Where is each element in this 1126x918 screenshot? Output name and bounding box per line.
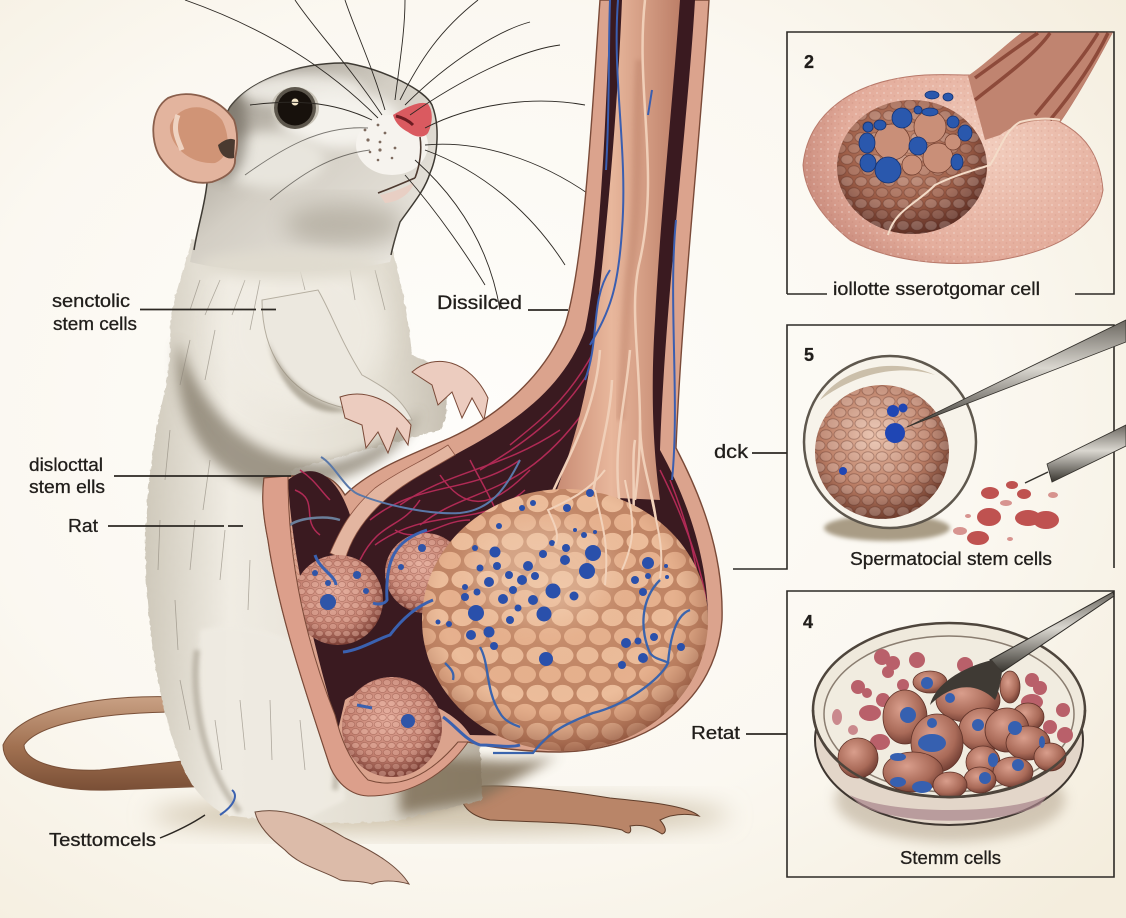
long blue nerve xyxy=(321,457,520,513)
blue loop xyxy=(288,518,340,527)
rat under-sac fur xyxy=(400,755,560,815)
panel 5 number: 5 xyxy=(804,345,814,365)
panel 5 cell ball xyxy=(815,385,949,519)
large testis blue spots xyxy=(436,489,685,669)
lower lip xyxy=(380,182,414,203)
panel 4 caption: Stemm cells xyxy=(900,848,1001,868)
left wall strip xyxy=(263,476,468,796)
label: dck xyxy=(714,442,787,463)
panel: step 5 xyxy=(733,320,1126,569)
head outline xyxy=(194,63,437,255)
whiskers xyxy=(185,0,590,310)
panel 2 number: 2 xyxy=(804,52,814,72)
fur strokes xyxy=(158,270,385,770)
small testis middle xyxy=(385,533,465,613)
ear xyxy=(153,94,237,183)
rat lower body shade xyxy=(199,627,345,822)
nose xyxy=(393,103,432,137)
label: dislocttal stem ells xyxy=(29,455,291,497)
panel 4 number: 4 xyxy=(803,612,813,632)
mouth xyxy=(378,137,421,193)
panel 5 dish xyxy=(804,356,976,528)
panel 5 shadow xyxy=(824,515,950,541)
panel 2 skin body xyxy=(803,33,1112,263)
label: dislocttal stem ells: dislocttal xyxy=(29,455,103,475)
paw right xyxy=(412,361,488,420)
cavity vessels xyxy=(295,340,706,600)
panel: step 2 xyxy=(787,32,1114,299)
label: Retat xyxy=(691,723,787,743)
petri dish xyxy=(813,623,1085,842)
panel 2 duct xyxy=(968,33,1112,140)
spatula xyxy=(930,592,1114,705)
nostril xyxy=(396,116,413,125)
panel 5 caption: Spermatocial stem cells xyxy=(850,549,1052,569)
sac wall texture xyxy=(268,482,340,770)
dish front rim xyxy=(813,710,1085,797)
label: Testtomcels xyxy=(49,815,205,850)
panel 5 dish inner shade xyxy=(820,366,935,400)
rat chest highlight xyxy=(215,250,385,410)
panel 5 tweezers xyxy=(907,320,1126,427)
tube pale nerves xyxy=(545,0,658,570)
rat illustration xyxy=(3,0,730,884)
rat thigh outline xyxy=(195,640,336,812)
back foot xyxy=(461,786,699,834)
panel 5 droplets xyxy=(953,481,1059,545)
face highlight xyxy=(203,74,405,247)
upper tube xyxy=(555,0,680,500)
tube texture xyxy=(620,60,640,420)
small testis upper xyxy=(293,555,383,645)
large testis xyxy=(422,470,708,753)
hind foot front xyxy=(255,811,409,884)
panel 2 caption: iollotte sserotgomar cell xyxy=(833,279,1040,299)
panel 2 blue spots xyxy=(859,91,972,183)
rat head xyxy=(190,63,437,272)
label: senctolic stem cells: stem cells xyxy=(53,314,137,334)
tail xyxy=(3,697,215,790)
arm shading xyxy=(268,340,350,412)
label: senctolic stem cells: senctolic xyxy=(52,291,130,311)
panel 2 cell cluster xyxy=(837,100,987,234)
label: Dissilced: Dissilced xyxy=(437,293,522,314)
inner arc wall xyxy=(330,445,455,560)
dish cell clusters xyxy=(838,671,1066,798)
dissection sac xyxy=(220,0,722,815)
sac outer wall xyxy=(263,0,722,795)
label: Dissilced xyxy=(437,293,568,314)
dish blue spots xyxy=(890,676,1045,793)
label: Rat: Rat xyxy=(68,516,98,536)
label: Retat: Retat xyxy=(691,723,740,743)
panel 2 nerve xyxy=(888,119,1060,235)
small testis lower xyxy=(342,677,442,777)
panel 5 blue spots xyxy=(839,404,908,475)
label: dislocttal stem ells: stem ells xyxy=(29,477,105,497)
label: Testtomcels: Testtomcels xyxy=(49,830,156,850)
blue dots on small testes xyxy=(312,544,426,728)
label: dck: dck xyxy=(714,442,749,463)
rat body xyxy=(145,240,482,823)
cavity blue vessels xyxy=(220,530,520,815)
paw left xyxy=(340,394,411,453)
large testis pale nerves xyxy=(548,470,661,585)
label: senctolic stem cells xyxy=(52,291,276,334)
large testis vessels xyxy=(445,580,690,753)
panel 5 needle xyxy=(1025,425,1126,483)
muzzle xyxy=(356,115,428,175)
eye xyxy=(271,87,319,129)
ground shadow xyxy=(150,797,730,833)
sac inner cavity xyxy=(288,0,708,735)
rat chest shading xyxy=(177,340,420,490)
panel: step 4 xyxy=(787,591,1114,877)
panel 2 light bumps xyxy=(874,111,961,175)
tube blue vessels xyxy=(585,0,676,480)
neck blend xyxy=(198,251,382,279)
dish small fragments xyxy=(832,649,1073,750)
arm xyxy=(262,290,412,420)
